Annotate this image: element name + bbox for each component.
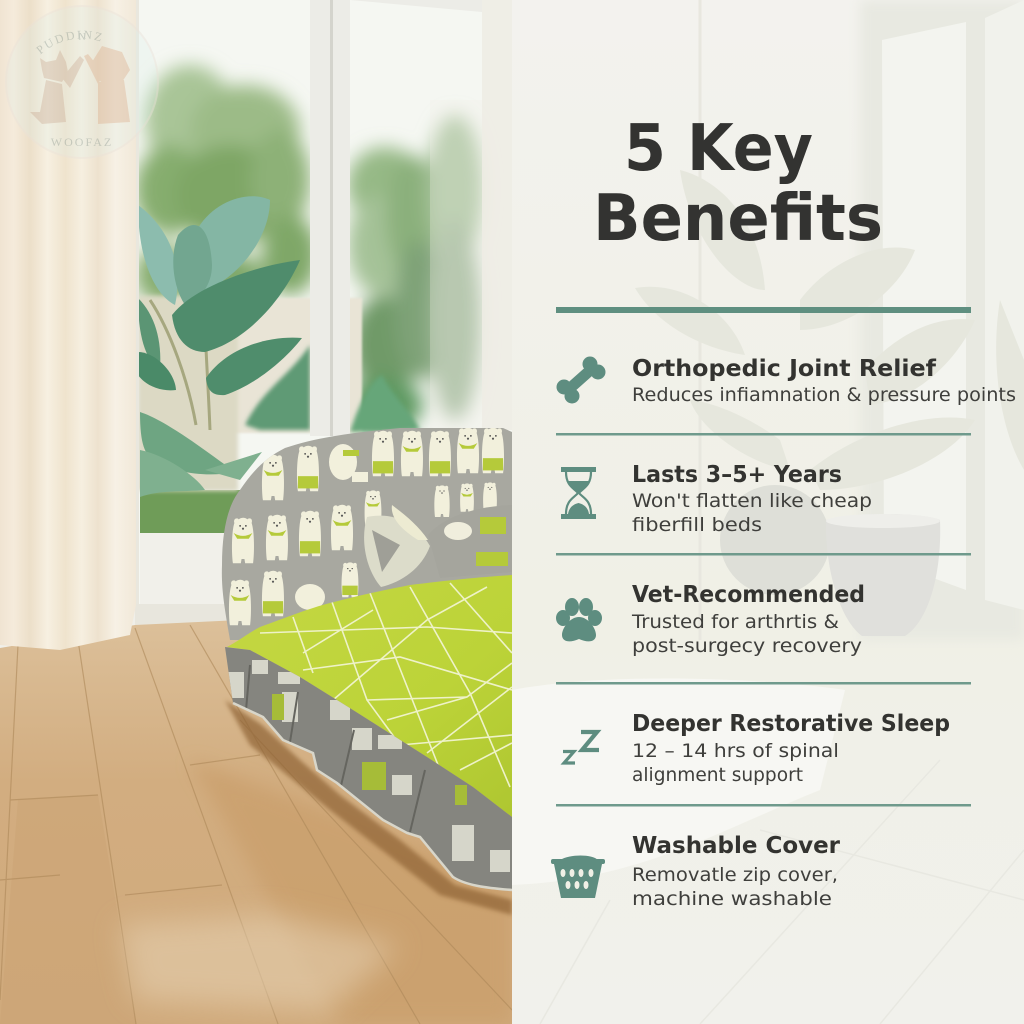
benefit 4: deeper restorative sleep [563,711,950,786]
garden view [135,0,515,625]
description 2: Won't flatten like cheap [632,490,872,512]
icon: hourglass [561,467,596,519]
logo dog [84,46,130,124]
logo lower lettering: WOOFAZ [51,135,113,149]
faint bed continuation [512,678,845,885]
logo lettering: PUDDINZ [36,30,102,54]
description 3: post-surgecy recovery [632,635,862,657]
description 5: machine washable [632,888,832,910]
heading 4: Deeper Restorative Sleep [632,711,950,737]
heading 2: Lasts 3–5+ Years [632,462,842,488]
curtain [0,0,136,650]
description 1: Reduces infiamnation & pressure points [632,384,1016,406]
green seat cushion [227,575,512,817]
title [593,112,883,256]
translucent benefits panel [512,0,1024,1024]
heading 5: Washable Cover [632,833,841,859]
description 2: fiberfill beds [632,514,762,536]
logo small N: N [78,32,86,43]
bed skirt [225,647,512,889]
description 4: alignment support [632,764,803,786]
heading 1: Orthopedic Joint Relief [632,356,937,382]
icon: laundry basket [551,856,605,898]
icon: sleep z letters [563,732,599,763]
bolster bow [364,505,512,587]
logo cat [30,50,84,124]
title: 5 Key [624,112,813,186]
benefit 1: orthopedic joint relief [556,356,1016,406]
heading 3: Vet-Recommended [632,582,865,608]
window frames [310,0,350,436]
faint background window and plant [635,0,1024,640]
description 5: Removatle zip cover, [632,864,838,886]
icon: paw print [556,598,602,641]
skirt hem [233,703,512,890]
icon: bone [556,356,606,404]
benefit 5: washable cover [551,833,841,910]
bed backrest with bears [215,420,515,645]
logo watermark [30,30,159,149]
title: Benefits [593,182,883,256]
description 3: Trusted for arthrtis & [631,611,839,633]
description 4: 12 – 14 hrs of spinal [632,740,839,762]
plant leaves [138,196,420,497]
background scene [0,0,512,1024]
title divider [556,307,971,313]
wood floor [0,620,512,1024]
benefit 2: lasts 3-5+ years [561,462,872,536]
pet bed [215,420,520,900]
benefit 3: vet-recommended [556,582,865,657]
